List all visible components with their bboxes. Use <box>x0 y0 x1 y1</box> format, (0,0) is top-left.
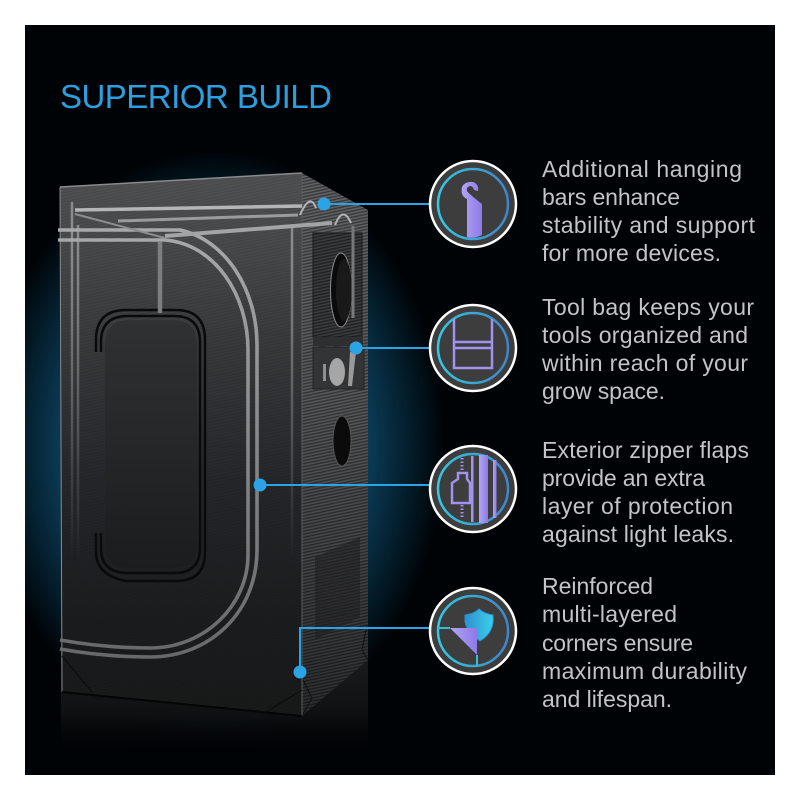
text: tool bag: tools organized and <box>542 322 748 348</box>
callout line: hanging bars <box>318 198 434 210</box>
tent front wall <box>60 173 302 716</box>
door zipper trim <box>58 230 257 657</box>
icon: zipper flap <box>430 446 516 532</box>
tent floor reflection <box>61 660 368 755</box>
text: hanging bars: for more devices. <box>542 240 721 266</box>
text: zipper flaps: provide an extra <box>542 465 705 491</box>
text: zipper flaps: Exterior zipper flaps <box>542 437 749 463</box>
tent side wall <box>302 173 368 716</box>
text: corners: and lifespan. <box>542 686 672 712</box>
icon: hook <box>430 161 516 247</box>
icon: tool bag <box>430 305 516 391</box>
text: zipper flaps: layer of protection <box>542 493 733 519</box>
tool bag <box>313 337 364 389</box>
text: corners: corners ensure <box>542 630 693 656</box>
text: tool bag: within reach of your <box>541 350 748 376</box>
lower vent <box>333 416 351 466</box>
icon: reinforced corner <box>430 588 516 674</box>
text: corners: maximum durability <box>542 658 748 684</box>
upper vent <box>313 233 362 337</box>
callout line: zipper flaps <box>254 478 432 492</box>
text: hanging bars: bars enhance <box>542 184 680 210</box>
text: tool bag <box>541 294 754 404</box>
text: tool bag: Tool bag keeps your <box>542 294 754 320</box>
text: tool bag: grow space. <box>542 378 665 404</box>
text: corners <box>542 573 748 712</box>
callout line: tool bag <box>350 342 432 354</box>
hanging bars <box>75 201 353 318</box>
text: zipper flaps <box>542 437 749 547</box>
grow tent illustration <box>58 173 368 755</box>
window flap <box>96 310 205 581</box>
text: zipper flaps: against light leaks. <box>542 521 734 547</box>
text: hanging bars: Additional hanging <box>542 156 742 182</box>
text: corners: Reinforced <box>542 573 653 599</box>
title: SUPERIOR BUILD <box>60 78 332 115</box>
text: hanging bars <box>542 156 756 266</box>
text: corners: multi-layered <box>542 601 677 627</box>
text: hanging bars: stability and support <box>542 212 756 238</box>
callout line: corners <box>294 628 432 678</box>
